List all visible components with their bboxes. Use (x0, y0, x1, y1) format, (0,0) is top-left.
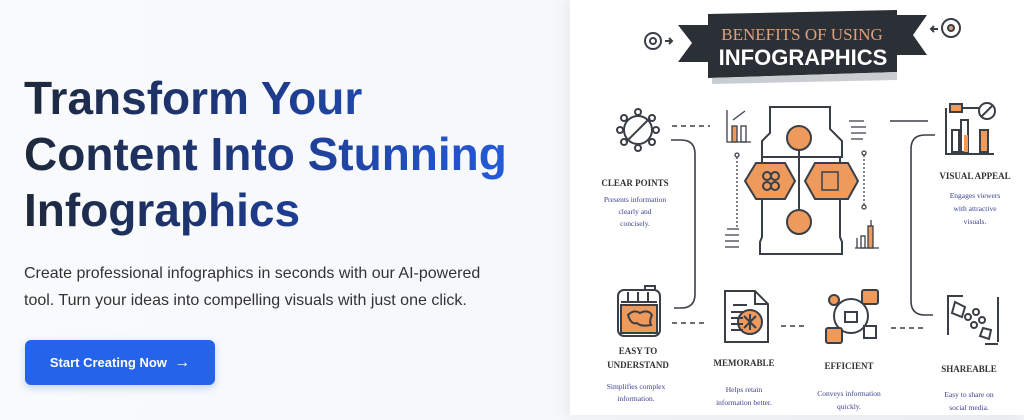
text: clear points: concisely. (620, 219, 650, 228)
text: clear points: clearly and (618, 207, 652, 216)
text: efficient: EFFICIENT (824, 361, 874, 371)
banner: BENEFITS OF USING (721, 25, 883, 44)
text: clear points: CLEAR POINTS (601, 178, 669, 188)
text: easy to understand (607, 346, 669, 403)
icon: easy to understand (618, 286, 660, 336)
text: visual appeal: Engages viewers (950, 191, 1000, 200)
text: easy to understand: information. (617, 394, 655, 403)
text: efficient: Conveys information (817, 389, 881, 398)
text: clear points: Presents information (604, 195, 666, 204)
title: Content Into Stunning (24, 128, 507, 180)
icon: gear right (931, 19, 960, 37)
title: Infographics (24, 184, 300, 236)
panel: infographic image (570, 0, 1024, 415)
text: memorable: Helps retain (726, 385, 762, 394)
icon: gear left (645, 33, 672, 49)
text: memorable (713, 358, 775, 407)
text: memorable: information better. (716, 398, 772, 407)
text: shareable: SHAREABLE (941, 364, 997, 374)
banner (678, 10, 927, 84)
text: visual appeal: VISUAL APPEAL (939, 171, 1011, 181)
text: shareable (941, 364, 997, 412)
text: shareable: Easy to share on (944, 390, 994, 399)
cta button (25, 340, 215, 385)
icon: efficient (826, 290, 878, 343)
icon: clear points (617, 109, 659, 151)
icon: shareable (948, 295, 998, 344)
text: efficient (817, 361, 881, 411)
description: Create professional infographics in seconds with our AI-powered (24, 265, 480, 282)
text: easy to understand: UNDERSTAND (607, 360, 669, 370)
text: memorable: MEMORABLE (713, 358, 775, 368)
text: efficient: quickly. (837, 402, 861, 411)
text: visual appeal: with attractive (953, 204, 997, 213)
text: shareable: social media. (949, 403, 989, 412)
cta button: Start Creating Now (50, 355, 167, 370)
title: Transform Your (24, 72, 362, 124)
text: visual appeal: visuals. (964, 217, 986, 226)
icon: memorable (725, 291, 768, 342)
text: easy to understand: Simplifies complex (607, 382, 666, 391)
description (24, 265, 480, 309)
title (24, 70, 564, 238)
text: clear points (601, 178, 669, 228)
description: tool. Turn your ideas into compelling visuals with just one click. (24, 292, 467, 309)
text: visual appeal (939, 171, 1011, 226)
text: easy to understand: EASY TO (619, 346, 657, 356)
connectors (671, 121, 935, 328)
central diagram (745, 107, 858, 254)
cta button: → (174, 354, 190, 370)
banner: INFOGRAPHICS (719, 45, 887, 70)
icon: visual appeal (946, 103, 995, 154)
small chart icons (725, 110, 879, 248)
